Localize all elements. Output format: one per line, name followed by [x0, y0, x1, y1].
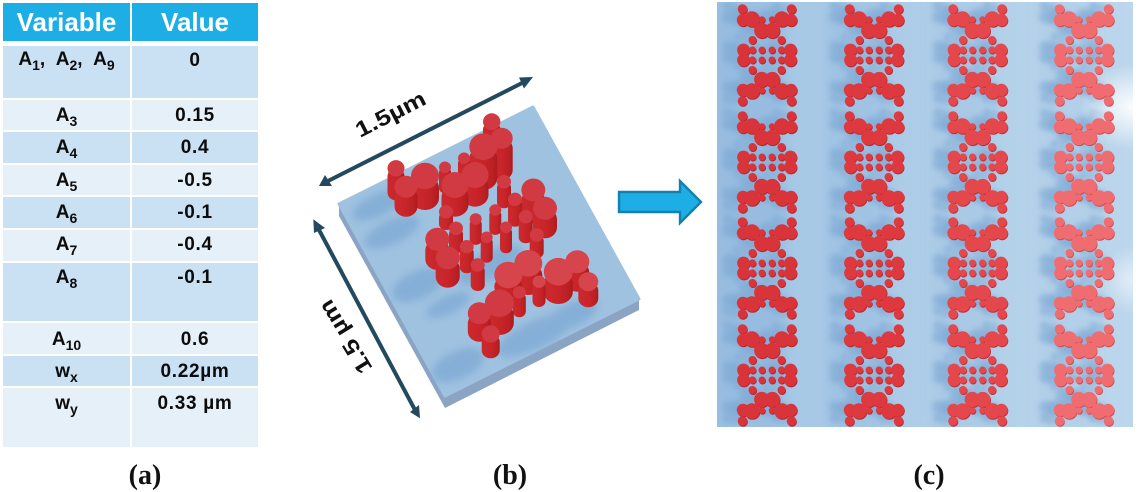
row A5: A5 [56, 170, 77, 194]
table header [3, 3, 258, 41]
row A6: -0.1 [177, 202, 213, 223]
light glow upper [1086, 70, 1133, 144]
dimension label: side width: 1.5 µm [313, 295, 377, 378]
array background [717, 2, 1133, 427]
array shadows [722, 1, 1107, 425]
row A8 [3, 263, 258, 321]
light glow lower [1107, 253, 1133, 307]
dimension label: top width: 1.5µm [351, 86, 430, 142]
row A8: -0.1 [177, 267, 213, 288]
row A5: -0.5 [177, 170, 213, 191]
row A1 A2 A9: A1, A2, A9 [18, 49, 115, 73]
shadow bands [717, 2, 881, 427]
row A3 [3, 100, 258, 130]
plate top surface [339, 107, 639, 396]
row A4: A4 [56, 137, 77, 161]
column 3 pillars [947, 4, 1008, 427]
pillar shadows on plate [348, 183, 602, 390]
table header: Variable [17, 7, 116, 37]
bottom pillar cluster [468, 250, 598, 358]
row A7 [3, 230, 258, 261]
dimension arrow: top width [319, 77, 533, 186]
row wx [3, 356, 258, 386]
row A1 A2 A9 [3, 46, 258, 98]
row wy: 0.33 µm [158, 393, 232, 414]
row A5 [3, 165, 258, 195]
column 4 pillars [1054, 4, 1115, 427]
caption (c): (c) [913, 460, 945, 491]
row A7: A7 [56, 234, 77, 258]
row wx: wx [55, 361, 78, 385]
caption (b): (b) [493, 460, 527, 491]
row A6: A6 [56, 202, 77, 226]
row A10: A10 [52, 329, 81, 353]
row A10: 0.6 [181, 329, 209, 350]
row A4: 0.4 [181, 137, 209, 158]
caption (a): (a) [129, 460, 161, 491]
row A8: A8 [56, 267, 77, 291]
panel b: substrate plate with pillars [339, 107, 639, 408]
panel c: pillar array [712, 0, 1142, 430]
panel: variable table [3, 3, 258, 447]
column 1 pillars [737, 4, 798, 427]
middle pillar cluster [425, 175, 557, 291]
row A1 A2 A9: 0 [189, 50, 201, 71]
column 2 pillars [844, 4, 905, 427]
plate side faces [339, 203, 639, 408]
row A7: -0.4 [177, 234, 213, 255]
row wx: 0.22µm [160, 361, 230, 382]
row A6 [3, 197, 258, 228]
row wy: wy [55, 393, 78, 417]
row A3: A3 [56, 105, 77, 129]
row A3: 0.15 [175, 105, 215, 126]
row wy [3, 388, 258, 447]
dimension arrow: side width [313, 219, 420, 418]
table header: Value [161, 7, 229, 37]
top pillar cluster [388, 113, 513, 217]
row A10 [3, 323, 258, 354]
arrow: b to c [619, 181, 701, 223]
row A4 [3, 132, 258, 163]
